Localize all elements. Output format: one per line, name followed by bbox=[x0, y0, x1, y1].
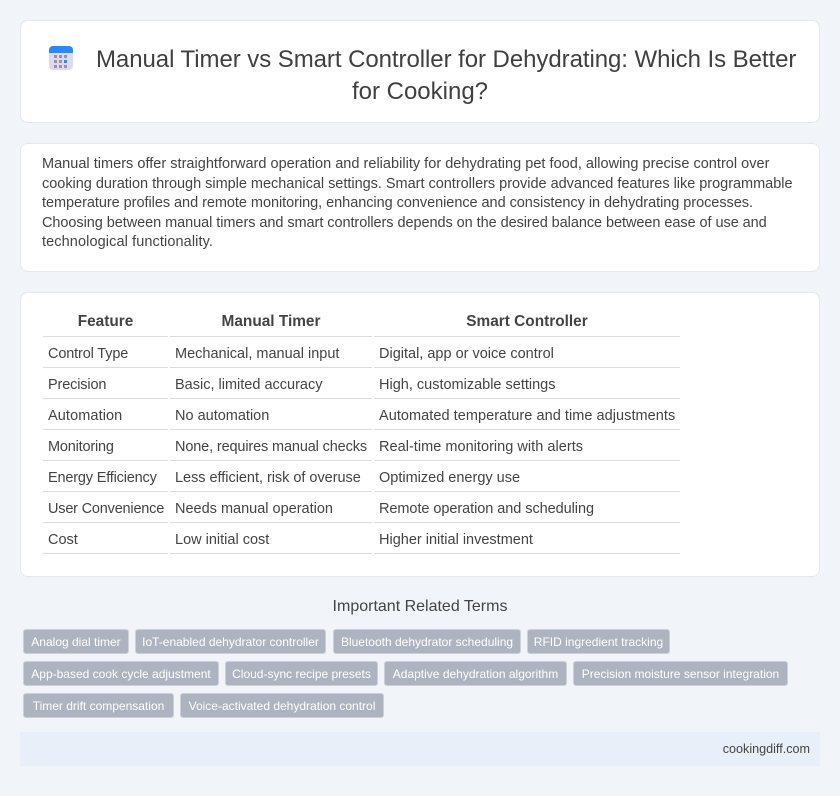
related term tags bbox=[23, 629, 788, 718]
comparison table: Basic, limited accuracy bbox=[175, 377, 322, 393]
comparison table: Automation bbox=[48, 408, 122, 424]
related term tags: Precision moisture sensor integration bbox=[582, 667, 779, 681]
text block: description: Choosing between manual timers and smart controllers depends on the desired balance between ease of use and bbox=[42, 215, 767, 231]
comparison table: User Convenience bbox=[48, 501, 164, 517]
related term tags: Timer drift compensation bbox=[33, 699, 164, 713]
comparison table: Feature bbox=[78, 313, 133, 330]
comparison table: Less efficient, risk of overuse bbox=[175, 470, 361, 486]
title bbox=[96, 46, 796, 105]
comparison table: Low initial cost bbox=[175, 532, 269, 548]
comparison table: Smart Controller bbox=[466, 313, 588, 330]
related term tags: Analog dial timer bbox=[31, 635, 121, 649]
comparison table: Control Type bbox=[48, 346, 128, 362]
comparison table: Energy Efficiency bbox=[48, 470, 157, 486]
footer credit: cookingdiff.com bbox=[723, 742, 810, 756]
related term tags: RFID ingredient tracking bbox=[534, 635, 663, 649]
related term tags: Bluetooth dehydrator scheduling bbox=[341, 635, 513, 649]
comparison table: No automation bbox=[175, 408, 269, 424]
heading: related terms: Important Related Terms bbox=[333, 598, 507, 615]
comparison table: Needs manual operation bbox=[175, 501, 333, 517]
comparison table: Optimized energy use bbox=[379, 470, 520, 486]
comparison table: Monitoring bbox=[48, 439, 114, 455]
text block: description: cooking duration through simple mechanical settings. Smart controllers provide advanced features like programmable bbox=[42, 176, 792, 192]
text block: description: technological functionality. bbox=[42, 234, 213, 250]
comparison table: Precision bbox=[48, 377, 106, 393]
comparison table: Automated temperature and time adjustments bbox=[379, 408, 675, 424]
comparison table: Digital, app or voice control bbox=[379, 346, 554, 362]
comparison table: Mechanical, manual input bbox=[175, 346, 339, 362]
panel: description bbox=[20, 143, 820, 272]
related term tags: Adaptive dehydration algorithm bbox=[393, 667, 558, 681]
comparison table: Remote operation and scheduling bbox=[379, 501, 594, 517]
footer bar bbox=[20, 732, 820, 766]
panel: title card bbox=[20, 20, 820, 123]
comparison table: None, requires manual checks bbox=[175, 439, 367, 455]
comparison table: Cost bbox=[48, 532, 78, 548]
text block: description bbox=[42, 156, 792, 250]
related term tags: App-based cook cycle adjustment bbox=[31, 667, 211, 681]
related term tags: IoT-enabled dehydrator controller bbox=[142, 635, 319, 649]
icon: calendar bbox=[49, 46, 73, 70]
text block: description: Manual timers offer straightforward operation and reliability for dehydrating pet food, allowing precise control over bbox=[42, 156, 769, 172]
comparison table: Manual Timer bbox=[222, 313, 320, 330]
related term tags: Cloud-sync recipe presets bbox=[232, 667, 371, 681]
title: Manual Timer vs Smart Controller for Dehydrating: Which Is Better bbox=[96, 46, 796, 73]
comparison table: Real-time monitoring with alerts bbox=[379, 439, 583, 455]
comparison table: High, customizable settings bbox=[379, 377, 556, 393]
related term tags: Voice-activated dehydration control bbox=[189, 699, 375, 713]
comparison table: Higher initial investment bbox=[379, 532, 533, 548]
panel: comparison table card bbox=[20, 292, 820, 577]
text block: description: temperature profiles and remote monitoring, enhancing convenience and consistency in dehydrating processes. bbox=[42, 195, 753, 211]
title: for Cooking? bbox=[352, 78, 488, 105]
